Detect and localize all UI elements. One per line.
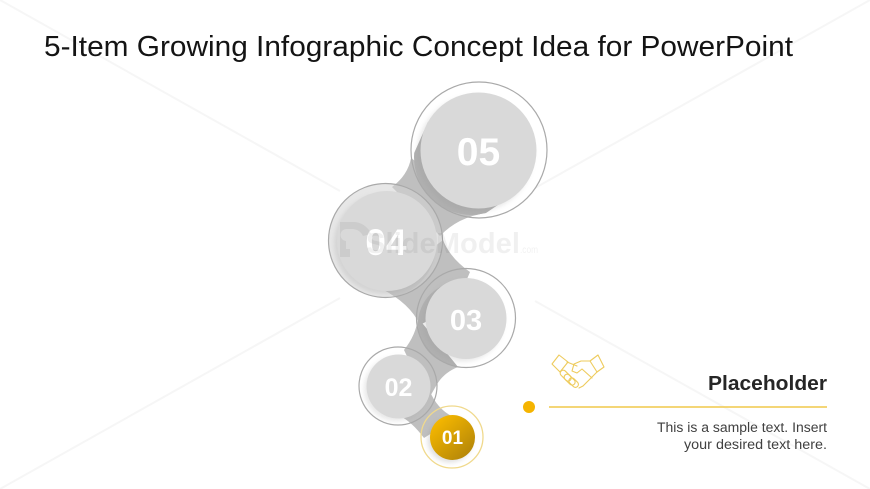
watermark bbox=[340, 222, 538, 260]
callout body text bbox=[657, 420, 827, 452]
callout divider line bbox=[549, 406, 827, 408]
circle 03 bbox=[416, 268, 516, 368]
connector bands bbox=[380, 158, 486, 438]
circle 01: 01 bbox=[442, 428, 463, 449]
watermark: SlideModel bbox=[366, 228, 520, 260]
icon: handshake bbox=[552, 355, 604, 389]
callout body text: This is a sample text. Insert bbox=[657, 420, 827, 435]
circle 05 bbox=[411, 82, 547, 218]
circle 05: 05 bbox=[457, 131, 500, 174]
circle 02 bbox=[359, 347, 437, 425]
circle 02: 02 bbox=[385, 374, 412, 402]
circle 04 bbox=[328, 184, 442, 298]
circle 03: 03 bbox=[450, 305, 482, 337]
callout heading: Placeholder bbox=[708, 373, 827, 395]
callout body text: your desired text here. bbox=[684, 437, 827, 452]
callout: placeholder bbox=[523, 373, 827, 452]
circle 01 bbox=[421, 406, 483, 468]
circle 04: 04 bbox=[365, 222, 407, 263]
callout marker dot bbox=[523, 401, 535, 413]
growing circle chain bbox=[328, 82, 547, 468]
watermark: .com bbox=[520, 245, 538, 256]
title: 5-Item Growing Infographic Concept Idea for PowerPoint bbox=[44, 31, 793, 63]
